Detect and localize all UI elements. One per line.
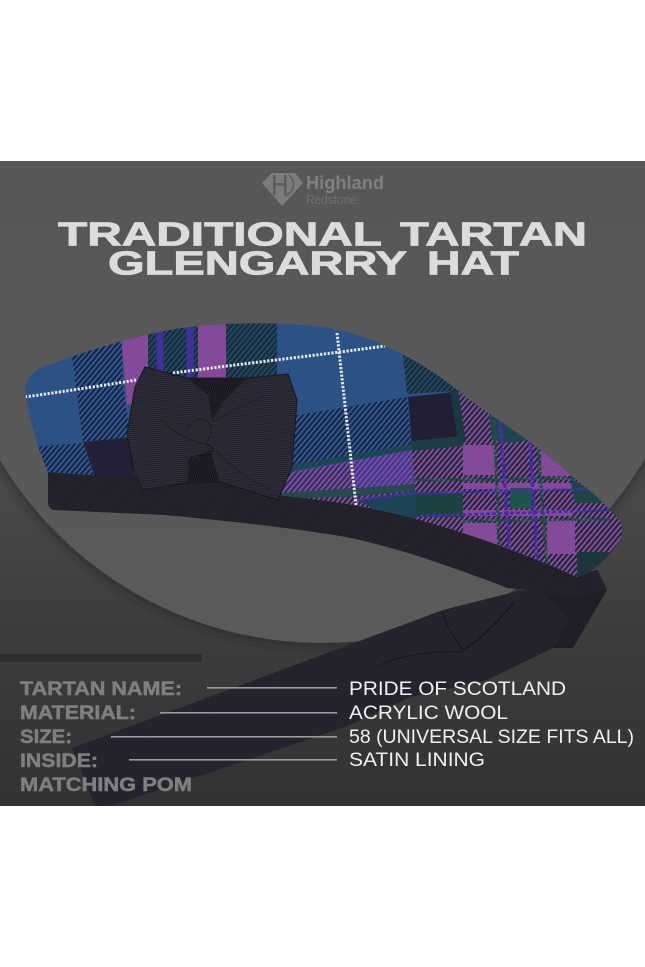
- spec: size: 58 (UNIVERSAL SIZE FITS ALL): [349, 726, 634, 748]
- decorative dark bar: [0, 654, 202, 662]
- brand name: Highland: [306, 172, 384, 193]
- spec: size: SIZE:: [20, 727, 72, 748]
- panel background: [0, 161, 645, 806]
- spec: inside: SATIN LINING: [349, 749, 485, 771]
- spec: size: [20, 726, 634, 748]
- spec: inside: INSIDE:: [20, 751, 98, 772]
- tartan: horizontal green lines: [413, 478, 610, 521]
- tartan: purple column centre: [198, 324, 226, 378]
- title: TRADITIONAL: [58, 216, 382, 252]
- tartan: vertical green lines: [494, 420, 548, 580]
- tartan: central green square: [510, 488, 532, 508]
- tartan: navy block right: [408, 392, 462, 447]
- title: TARTAN: [400, 216, 587, 252]
- tartan: hatched column centre: [226, 323, 277, 378]
- tartan: left lower row: [38, 443, 94, 476]
- logo: [262, 172, 384, 207]
- tartan: violet stripes: [160, 325, 190, 385]
- icon: diamond logo mark: [262, 173, 303, 206]
- spec: material: ACRYLIC WOOL: [349, 702, 508, 724]
- spec: tartan name: TARTAN NAME:: [20, 679, 182, 700]
- spec: matching pom: MATCHING POM: [20, 775, 192, 796]
- hat band: [48, 470, 607, 598]
- bow: rear folds: [187, 378, 247, 420]
- specification list: [20, 678, 634, 796]
- tartan: green column: [148, 326, 199, 378]
- infographic panel: [0, 161, 645, 806]
- tartan: horizontal violet lines: [355, 489, 610, 516]
- tartan: solid purple blocks: [463, 445, 575, 554]
- tartan: hatched top right: [403, 354, 457, 394]
- bow: [127, 367, 297, 500]
- spec: inside: [20, 749, 485, 772]
- tartan: middle hatched band: [292, 397, 412, 470]
- tartan: lower purple strip: [280, 484, 415, 498]
- tartan: purple band centre: [280, 450, 415, 494]
- brand sub-name: Redstone: [306, 193, 357, 207]
- spec: tartan name: [20, 678, 566, 700]
- spec: material: MATERIAL:: [20, 703, 136, 724]
- tartan: dark green block: [415, 493, 463, 517]
- tartan: vertical violet lines: [500, 420, 537, 560]
- title: HAT: [427, 244, 519, 282]
- tartan: white overcheck: [25, 333, 385, 505]
- spec: tartan name: PRIDE OF SCOTLAND: [349, 678, 566, 700]
- bow: knot: [160, 395, 270, 490]
- hat tail ribbon: [72, 570, 607, 806]
- spec: material: [20, 702, 508, 724]
- tartan: far right green blocks: [570, 478, 603, 503]
- tartan crown: [25, 323, 622, 577]
- tartan: right purple hatched field: [412, 388, 622, 577]
- tartan: left hatched column: [72, 341, 128, 442]
- title: GLENGARRY: [108, 244, 407, 282]
- tartan: upper right green hatch: [489, 414, 527, 443]
- tartan: navy block left: [83, 437, 135, 480]
- tartan: purple column left: [121, 330, 150, 405]
- title: [58, 216, 587, 282]
